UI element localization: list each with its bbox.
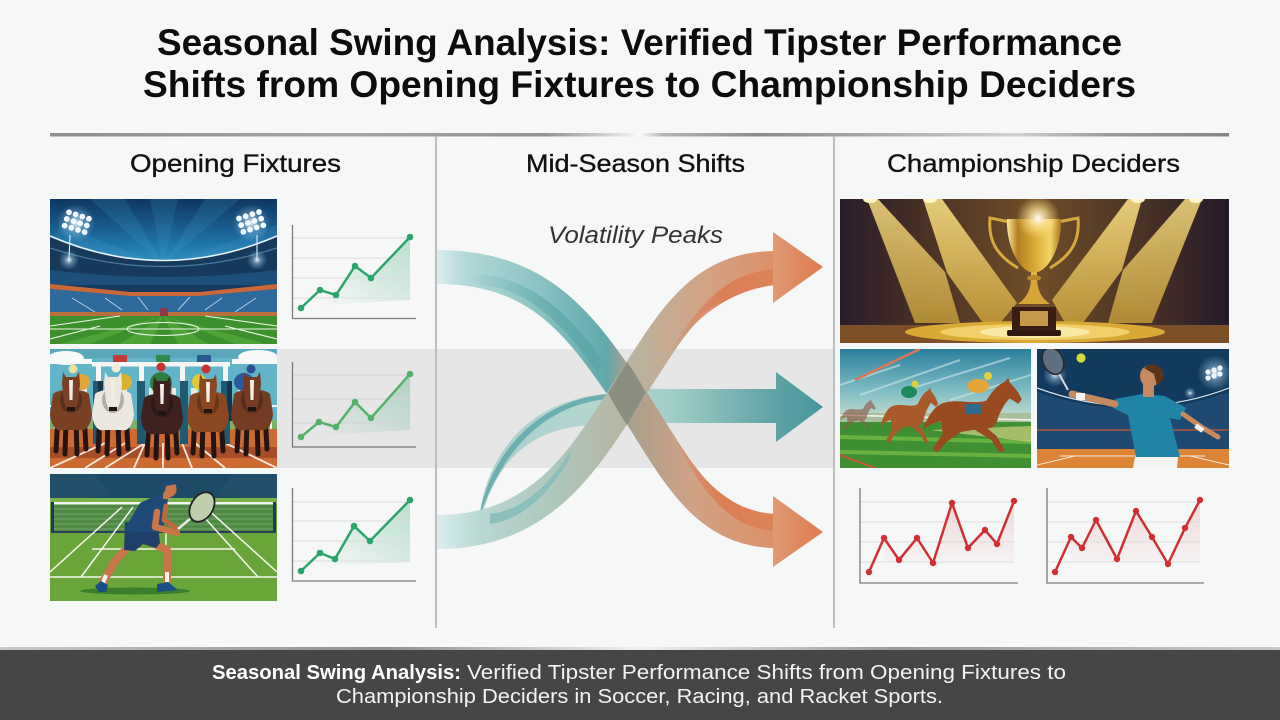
arrow: teal to orange descending ribbon [437, 267, 823, 567]
chart: racket sports tipster performance deciders [1047, 488, 1204, 583]
title [143, 22, 1136, 105]
chart: racing tipster performance opening [292, 362, 416, 447]
illustration: galloping racehorses [840, 349, 1031, 468]
footer caption bar: Championship Deciders in Soccer, Racing, and Racket Sports. [336, 686, 943, 708]
arrow: teal to orange ascending ribbon [437, 232, 823, 532]
heading: Mid-Season Shifts: Mid-Season Shifts [526, 150, 745, 178]
chart: racket sports tipster performance opening [292, 488, 416, 581]
title: Shifts from Opening Fixtures to Championship Deciders [143, 64, 1136, 105]
heading: Opening Fixtures: Opening Fixtures [130, 150, 341, 178]
illustration: soccer stadium [50, 199, 277, 344]
footer caption bar [0, 650, 1280, 720]
illustration: tennis player on grass court [50, 474, 277, 601]
label: Volatility Peaks: Volatility Peaks [548, 222, 723, 249]
title: Seasonal Swing Analysis: Verified Tipster Performance [157, 22, 1122, 63]
illustration: gold trophy under spotlights [840, 195, 1229, 343]
chart: racing tipster performance deciders [860, 488, 1018, 583]
illustration: tennis player serving in arena [1037, 344, 1233, 468]
chart: soccer tipster performance opening [292, 225, 416, 318]
footer caption bar: Verified Tipster Performance Shifts from Opening Fixtures to [467, 662, 1066, 684]
footer caption bar: Seasonal Swing Analysis: [212, 662, 461, 684]
illustration: horses at starting gate [48, 349, 278, 468]
heading: Championship Deciders: Championship Deciders [887, 150, 1180, 178]
arrow: middle teal arrow into mid row [478, 372, 823, 530]
highlighted middle row band [277, 349, 834, 468]
